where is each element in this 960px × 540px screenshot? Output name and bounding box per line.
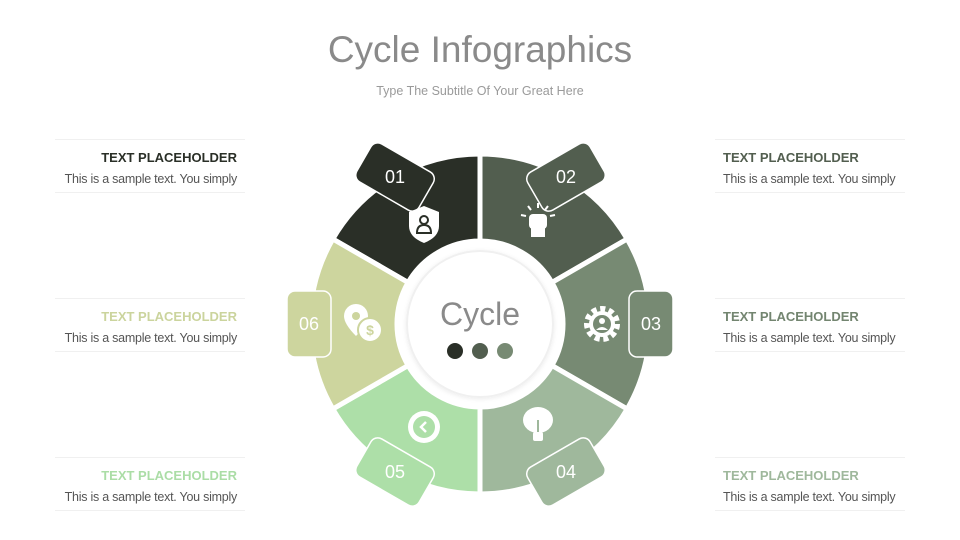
- badge 06: [287, 291, 331, 357]
- title: Cycle Infographics: [328, 29, 632, 70]
- segment 01: [333, 154, 480, 282]
- segment 03: [552, 239, 650, 409]
- badge 04: [524, 435, 608, 509]
- center circle: [397, 241, 563, 407]
- icon: fist idea: [521, 203, 555, 237]
- icon: shield: [409, 206, 439, 243]
- text block 02: This is a sample text. You simply: [723, 172, 895, 186]
- text block 06: TEXT PLACEHOLDER: [101, 309, 237, 324]
- segment 05: [333, 366, 480, 494]
- badge 02: [524, 140, 608, 214]
- badge 01: [353, 140, 437, 214]
- text block 02: TEXT PLACEHOLDER: [723, 150, 859, 165]
- center circle: Cycle: [440, 296, 520, 332]
- text block 05: [55, 457, 245, 511]
- segment 04: [480, 366, 627, 494]
- text block 03: [715, 298, 905, 352]
- text block 05: TEXT PLACEHOLDER: [101, 468, 237, 483]
- text block 05: This is a sample text. You simply: [65, 490, 237, 504]
- badge 01: 01: [385, 167, 405, 187]
- badge 05: 05: [385, 462, 405, 482]
- badge 06: 06: [299, 314, 319, 334]
- badge 05: [353, 435, 437, 509]
- text block 01: This is a sample text. You simply: [65, 172, 237, 186]
- icon: location money: [344, 304, 382, 342]
- icon: gear: [587, 309, 617, 339]
- badge 04: 04: [556, 462, 576, 482]
- badge 03: [629, 291, 673, 357]
- text block 04: TEXT PLACEHOLDER: [723, 468, 859, 483]
- text block 04: This is a sample text. You simply: [723, 490, 895, 504]
- text block 06: This is a sample text. You simply: [65, 331, 237, 345]
- badge 03: 03: [641, 314, 661, 334]
- segment 06: [310, 239, 408, 409]
- text block 03: This is a sample text. You simply: [723, 331, 895, 345]
- text block 02: [715, 139, 905, 193]
- text block 01: [55, 139, 245, 193]
- text block 03: TEXT PLACEHOLDER: [723, 309, 859, 324]
- text block 06: [55, 298, 245, 352]
- subtitle: Type The Subtitle Of Your Great Here: [376, 84, 584, 98]
- icon: clock: [408, 411, 440, 443]
- icon: brain: [523, 407, 553, 441]
- badge 02: 02: [556, 167, 576, 187]
- text block 04: [715, 457, 905, 511]
- segment 02: [480, 154, 627, 282]
- text block 01: TEXT PLACEHOLDER: [101, 150, 237, 165]
- icon: location money: $: [366, 322, 374, 338]
